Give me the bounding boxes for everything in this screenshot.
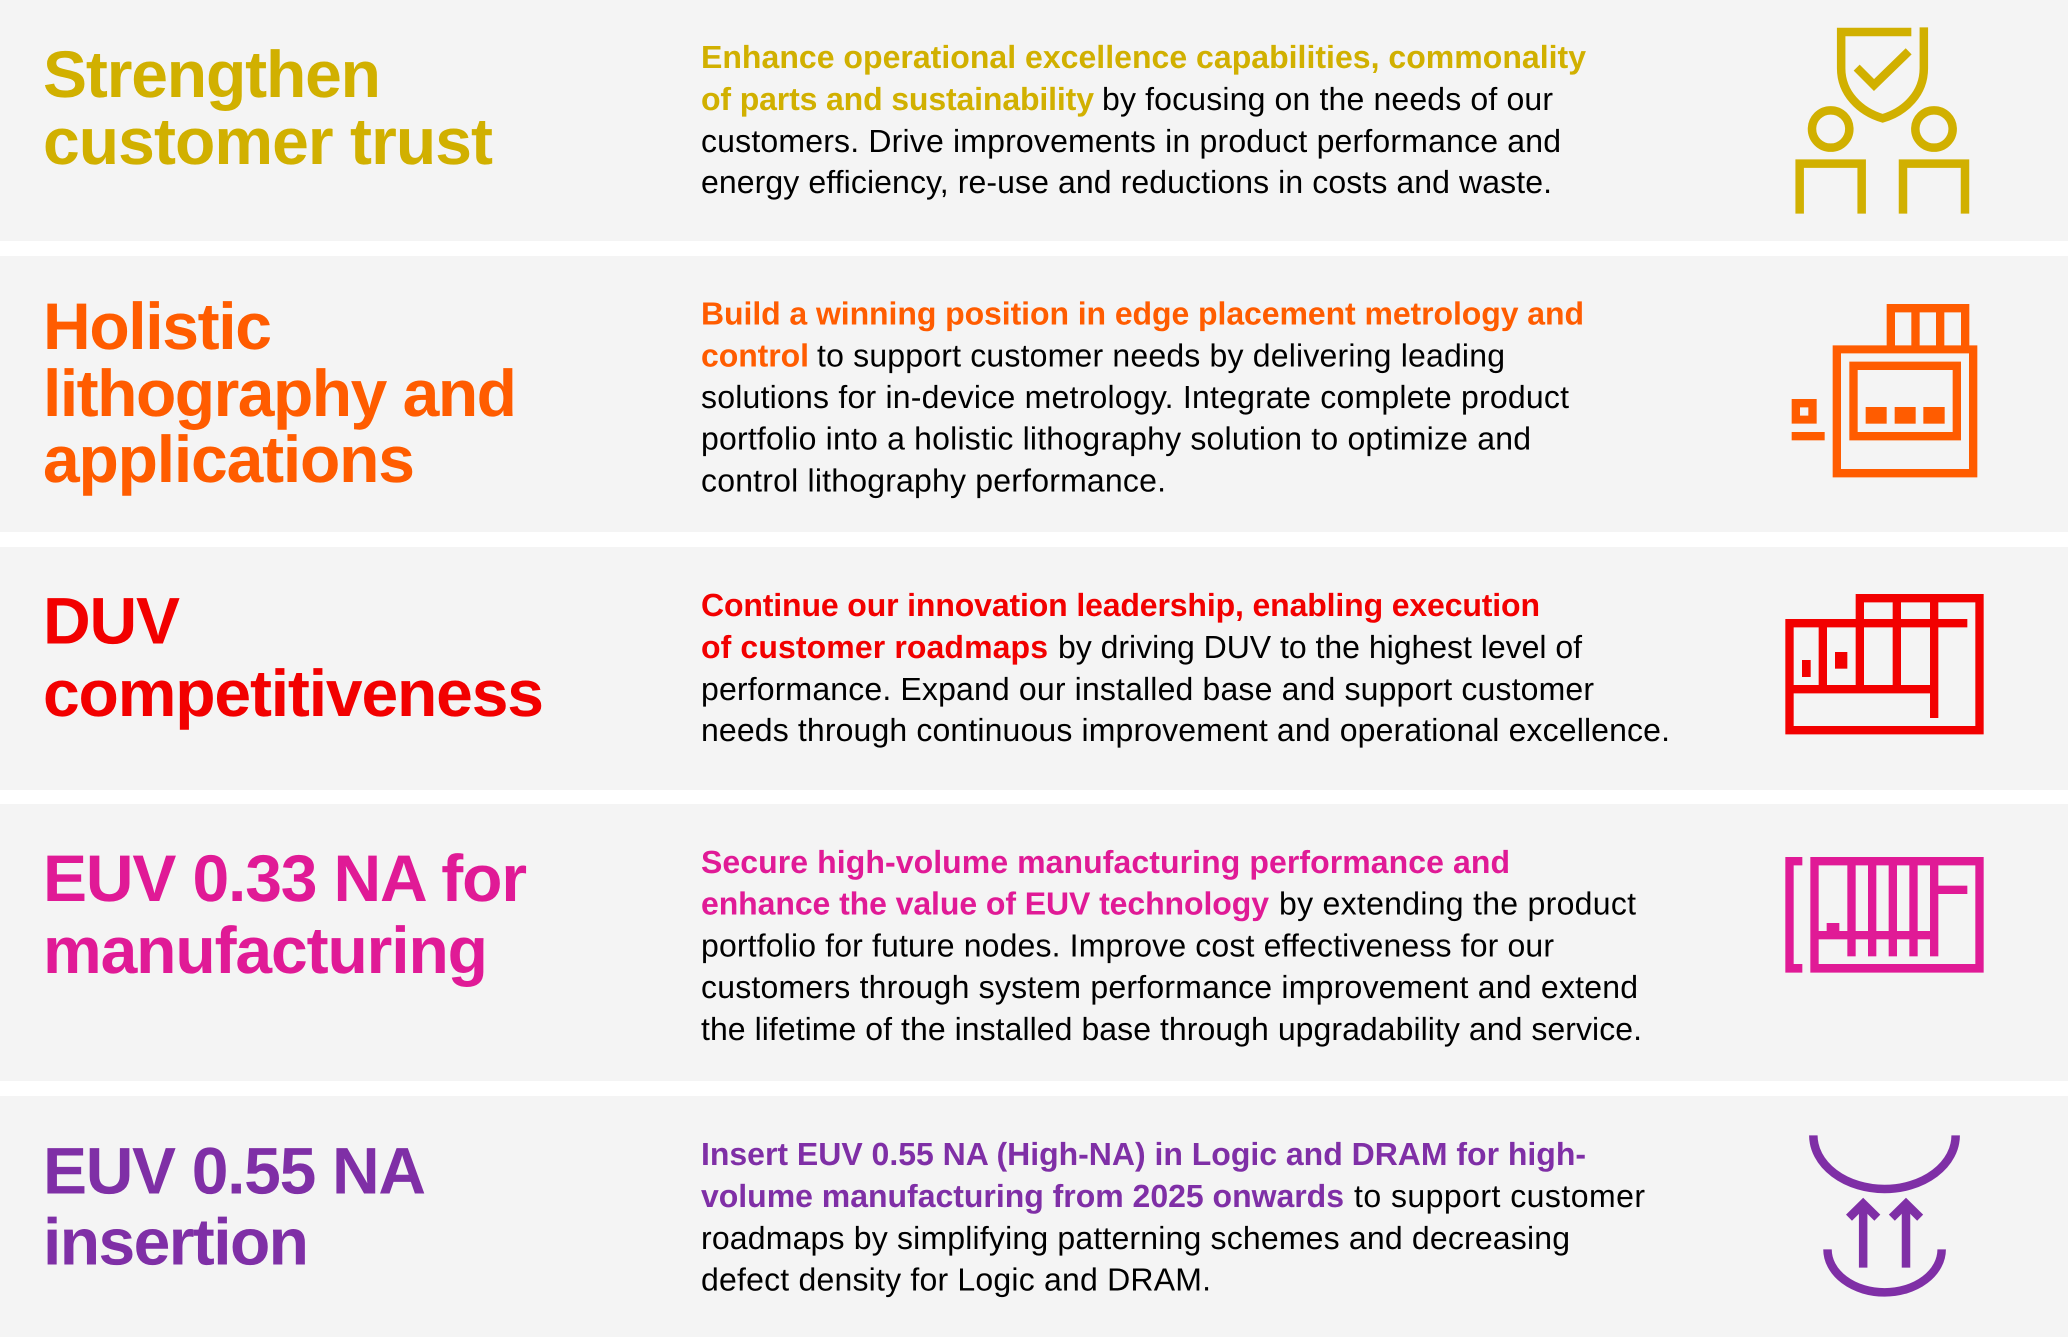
- text block: holistic lithography and applications: Build a winning position in edge placement metrology and: [701, 295, 1584, 331]
- heading: EUV 0.55 NA insertion: insertion: [43, 1204, 309, 1278]
- text block: EUV 0.55 NA insertion: volume manufacturing from 2025 onwards: [701, 1178, 1344, 1214]
- text block: EUV 0.55 NA insertion: Insert EUV 0.55 NA (High-NA) in Logic and DRAM for high-: [701, 1136, 1586, 1172]
- text block: DUV competitiveness: Continue our innovation leadership, enabling execution: [701, 587, 1540, 623]
- heading: EUV 0.55 NA insertion: EUV 0.55 NA: [43, 1134, 426, 1208]
- text block: EUV 0.55 NA insertion: to support customer: [1354, 1178, 1645, 1214]
- heading: strengthen customer trust: Strengthen: [43, 37, 381, 111]
- text block: strengthen customer trust: of parts and sustainability: [701, 81, 1094, 117]
- text block: DUV competitiveness: needs through continuous improvement and operational excellence.: [701, 712, 1670, 748]
- text block: holistic lithography and applications: solutions for in-device metrology. Integrate complete product: [701, 379, 1569, 415]
- text block: holistic lithography and applications: control: [701, 338, 809, 374]
- heading: strengthen customer trust: customer trust: [43, 104, 493, 178]
- text block: strengthen customer trust: energy efficiency, re-use and reductions in costs and waste.: [701, 164, 1552, 200]
- text block: EUV 0.33 NA for manufacturing: enhance the value of EUV technology: [701, 886, 1269, 922]
- text block: EUV 0.33 NA for manufacturing: the lifetime of the installed base through upgradability and service.: [701, 1011, 1642, 1047]
- icon: lithography machine: [1792, 304, 1977, 477]
- heading: EUV 0.33 NA for manufacturing: manufacturing: [43, 913, 488, 987]
- heading: DUV competitiveness: [43, 584, 544, 730]
- heading: strengthen customer trust: [43, 37, 493, 178]
- text block: DUV competitiveness: performance. Expand our installed base and support customer: [701, 671, 1594, 707]
- text block: DUV competitiveness: by driving DUV to the highest level of: [1058, 629, 1582, 665]
- text block: EUV 0.55 NA insertion: defect density for Logic and DRAM.: [701, 1262, 1211, 1298]
- icon: high-NA mirrors with arrows: [1813, 1135, 1956, 1292]
- panel: holistic lithography and applications: [0, 256, 2068, 532]
- text block: strengthen customer trust: Enhance operational excellence capabilities, commonality: [701, 39, 1586, 75]
- text block: EUV 0.33 NA for manufacturing: [701, 844, 1642, 1047]
- text block: strengthen customer trust: [701, 39, 1586, 200]
- text block: DUV competitiveness: [701, 587, 1670, 748]
- icon: shield with two people: [1800, 27, 1965, 214]
- heading: holistic lithography and applications: Holistic: [43, 289, 272, 363]
- icon: DUV machine: [1785, 594, 1984, 734]
- heading: DUV competitiveness: DUV: [43, 584, 180, 658]
- text block: EUV 0.33 NA for manufacturing: by extending the product: [1279, 886, 1636, 922]
- panel: strengthen customer trust: [0, 0, 2068, 241]
- text block: EUV 0.33 NA for manufacturing: customers through system performance improvement and extend: [701, 969, 1638, 1005]
- icon: EUV low-NA system: [1785, 857, 1984, 973]
- panel: EUV 0.55 NA insertion: [0, 1096, 2068, 1337]
- text block: holistic lithography and applications: [701, 295, 1584, 498]
- panel: EUV 0.33 NA for manufacturing: [0, 804, 2068, 1081]
- text block: holistic lithography and applications: to support customer needs by delivering leading: [817, 338, 1505, 374]
- text block: EUV 0.55 NA insertion: [701, 1136, 1645, 1298]
- panel: DUV competitiveness: [0, 547, 2068, 790]
- heading: DUV competitiveness: competitiveness: [43, 656, 544, 730]
- heading: EUV 0.33 NA for manufacturing: [43, 841, 527, 987]
- text block: strengthen customer trust: by focusing on the needs of our: [1102, 81, 1553, 117]
- text block: EUV 0.33 NA for manufacturing: portfolio for future nodes. Improve cost effectiveness for our: [701, 928, 1554, 964]
- text block: EUV 0.55 NA insertion: roadmaps by simplifying patterning schemes and decreasing: [701, 1220, 1570, 1256]
- heading: holistic lithography and applications: [43, 289, 517, 496]
- text block: strengthen customer trust: customers. Drive improvements in product performance and: [701, 123, 1561, 159]
- heading: holistic lithography and applications: applications: [43, 422, 415, 496]
- text block: holistic lithography and applications: control lithography performance.: [701, 462, 1166, 498]
- heading: EUV 0.55 NA insertion: [43, 1134, 426, 1278]
- heading: EUV 0.33 NA for manufacturing: EUV 0.33 NA for: [43, 841, 527, 915]
- heading: holistic lithography and applications: lithography and: [43, 356, 517, 430]
- text block: DUV competitiveness: of customer roadmaps: [701, 629, 1048, 665]
- text block: holistic lithography and applications: portfolio into a holistic lithography solution to optimize and: [701, 420, 1531, 456]
- text block: EUV 0.33 NA for manufacturing: Secure high-volume manufacturing performance and: [701, 844, 1510, 880]
